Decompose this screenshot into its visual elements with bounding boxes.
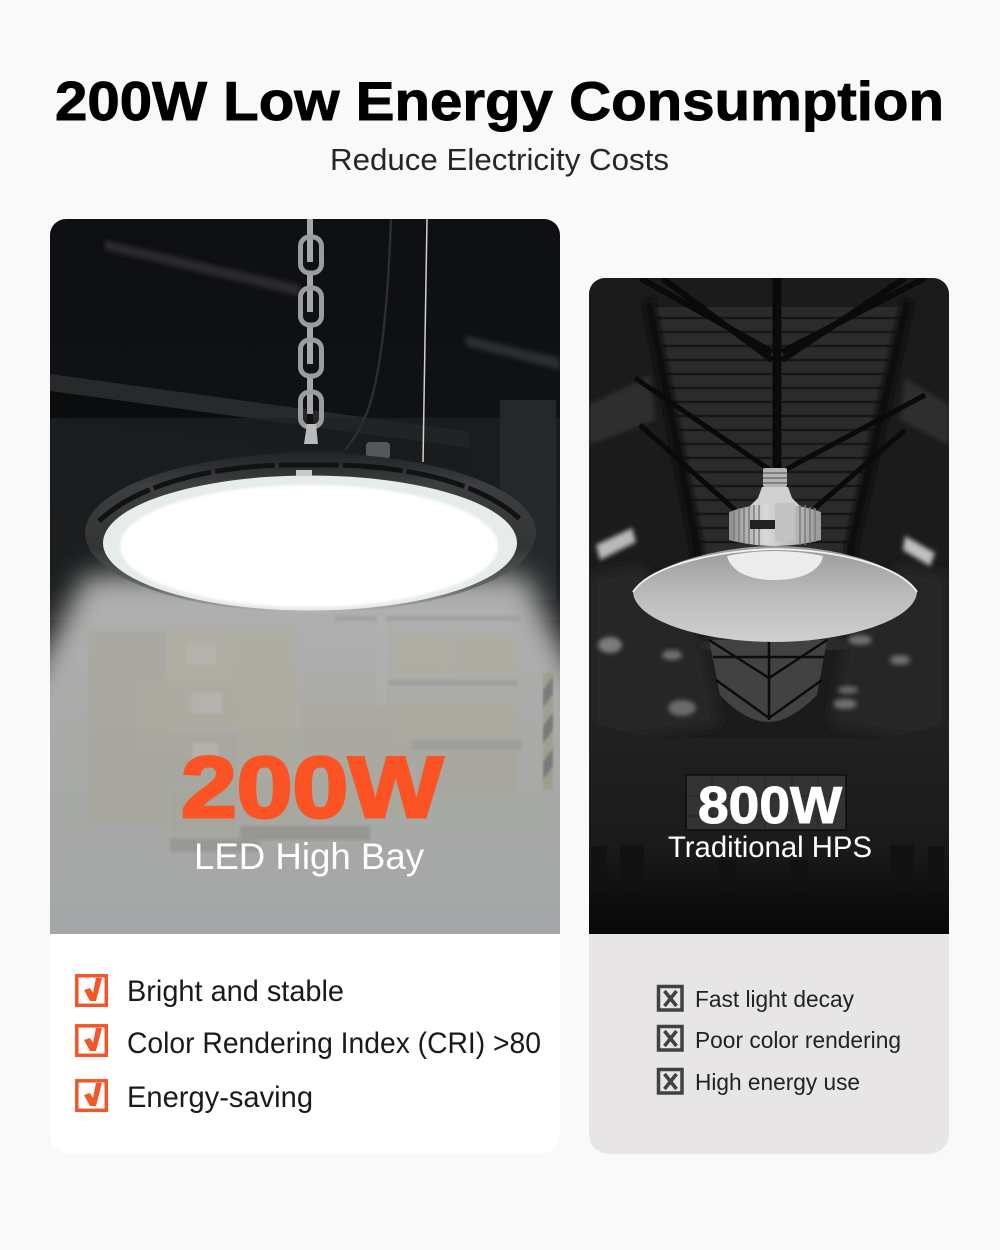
lamp top cap — [225, 450, 400, 470]
icon: grey cross box — [658, 1070, 682, 1093]
roof side panels — [592, 570, 714, 734]
panel card: grey base — [589, 278, 949, 1154]
panel card: white base — [50, 219, 560, 1154]
warehouse photo background — [50, 219, 560, 934]
lamp screw base — [763, 468, 787, 487]
shelving and pallets — [170, 616, 522, 852]
lamp body — [85, 453, 536, 613]
LED bulb — [727, 551, 823, 580]
dock doors — [592, 845, 944, 848]
lamp neck — [750, 487, 800, 506]
icon: orange check box — [77, 1081, 106, 1110]
factory roof photo background — [589, 278, 949, 934]
icon: orange check box — [77, 976, 106, 1005]
benefit 2: Color Rendering Index (CRI) >80 — [127, 1027, 541, 1060]
panel: traditional HPS — [589, 278, 949, 1154]
benefit 1: Bright and stable — [127, 975, 344, 1008]
icon: grey cross box — [658, 986, 682, 1010]
E27 lamp — [633, 468, 917, 642]
infographic canvas — [50, 80, 949, 1154]
Traditional HPS label: Traditional HPS — [668, 831, 872, 864]
roof trusses — [635, 278, 925, 510]
roof lantern — [709, 640, 827, 722]
LED High Bay label: LED High Bay — [194, 836, 424, 877]
roof centre slats — [653, 307, 903, 650]
factory lower wall — [589, 722, 949, 934]
skylights — [596, 528, 935, 716]
title: 200W Low Energy Consumption — [55, 70, 944, 132]
heat sink fins — [729, 503, 821, 546]
hazard post — [543, 672, 553, 790]
icon: grey cross box — [658, 1026, 682, 1050]
panel: LED high bay — [50, 219, 560, 1113]
power cable — [345, 219, 391, 450]
box labels — [186, 645, 222, 761]
chain — [300, 219, 322, 428]
shade rim highlight — [633, 549, 917, 592]
dark roof arches — [648, 300, 702, 640]
drawback 1: Fast light decay — [695, 986, 854, 1012]
drawback 2: Poor color rendering — [695, 1027, 901, 1053]
200W figure: 200W — [181, 740, 444, 836]
icon: orange check box — [77, 1026, 106, 1055]
800W figure: 800W — [698, 777, 843, 835]
cardboard boxes — [88, 630, 517, 835]
lamp shade — [633, 546, 917, 642]
suspension wire — [423, 219, 427, 462]
subtitle: Reduce Electricity Costs — [330, 142, 669, 177]
benefit 3: Energy-saving — [127, 1081, 313, 1114]
fog of light — [50, 556, 560, 934]
lamp hook — [304, 424, 318, 444]
drawback 3: High energy use — [695, 1069, 860, 1095]
rear wall window — [686, 775, 846, 830]
